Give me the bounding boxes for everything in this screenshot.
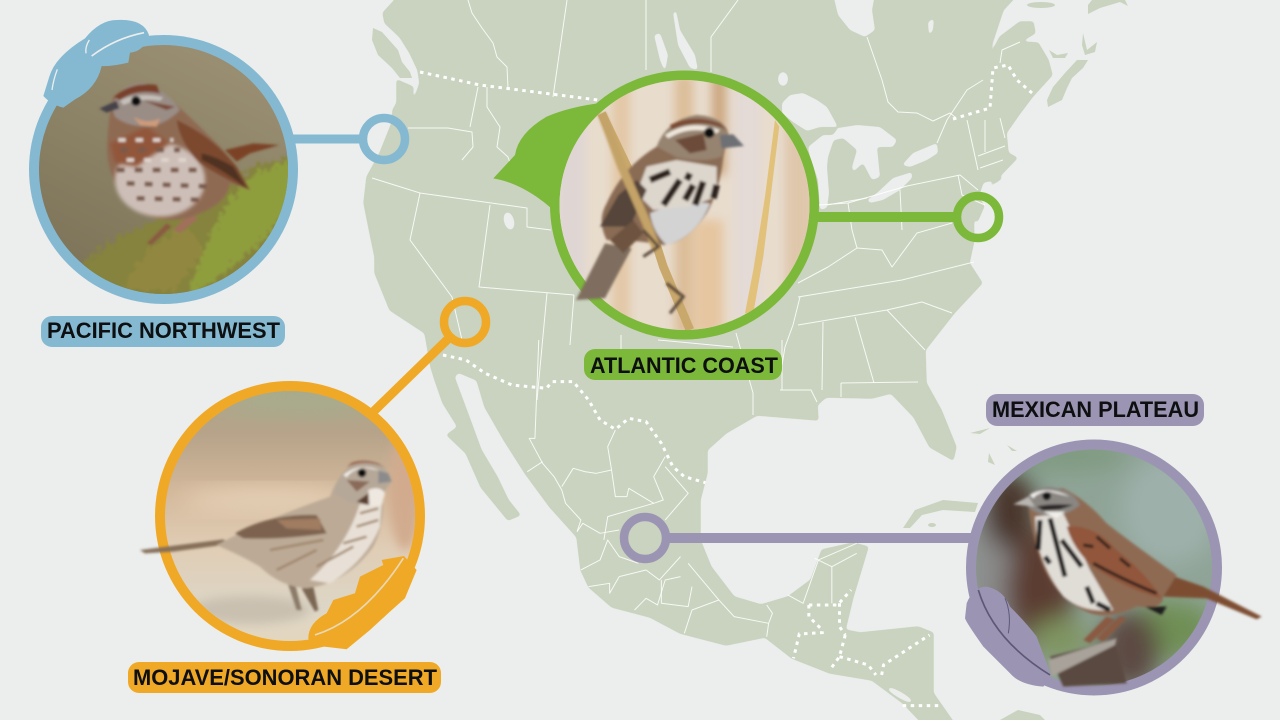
- icon: feather, blue: [43, 20, 149, 108]
- connector line: orange: [372, 338, 449, 413]
- panel: Atlantic Coast: [493, 70, 999, 380]
- map: North America: [364, 0, 1128, 720]
- label: Mexican Plateau: MEXICAN PLATEAU: [992, 397, 1199, 422]
- photo: Pacific Northwest sparrow: [35, 40, 295, 302]
- photo ring: orange: [155, 381, 425, 651]
- connector line: purple: [667, 533, 972, 543]
- icon: feather, orange: [308, 556, 417, 649]
- label: Atlantic Coast: ATLANTIC COAST: [590, 353, 779, 378]
- location ring: blue: [363, 118, 405, 160]
- icon: bird head silhouette: [493, 103, 610, 210]
- islands: [372, 0, 1128, 720]
- photo: Atlantic Coast sparrow: [555, 75, 815, 335]
- state and province borders: north: [372, 0, 1020, 415]
- state borders: Mexico: [527, 340, 857, 637]
- photo: Mojave/Sonoran sparrow: [140, 386, 421, 646]
- label: Mojave/Sonoran Desert: MOJAVE/SONORAN DESERT: [133, 665, 438, 690]
- photo ring: green: [550, 70, 819, 340]
- photo ring: blue: [29, 35, 298, 304]
- lakes: [502, 0, 938, 705]
- panel: Pacific Northwest: [29, 20, 405, 347]
- icon: feather, purple: [965, 587, 1052, 687]
- photo: Mexican Plateau sparrow: [970, 439, 1262, 690]
- panel: Mojave/Sonoran Desert: [128, 301, 486, 693]
- location ring: green: [957, 196, 999, 238]
- location ring: purple: [624, 517, 666, 559]
- location ring: orange: [444, 301, 486, 343]
- country borders: dotted: [420, 65, 1032, 706]
- connector line: blue: [292, 134, 362, 144]
- label: Pacific Northwest: PACIFIC NORTHWEST: [47, 318, 281, 343]
- photo ring: purple: [966, 440, 1222, 696]
- connector line: green: [815, 212, 956, 222]
- panel: Mexican Plateau: [624, 394, 1262, 696]
